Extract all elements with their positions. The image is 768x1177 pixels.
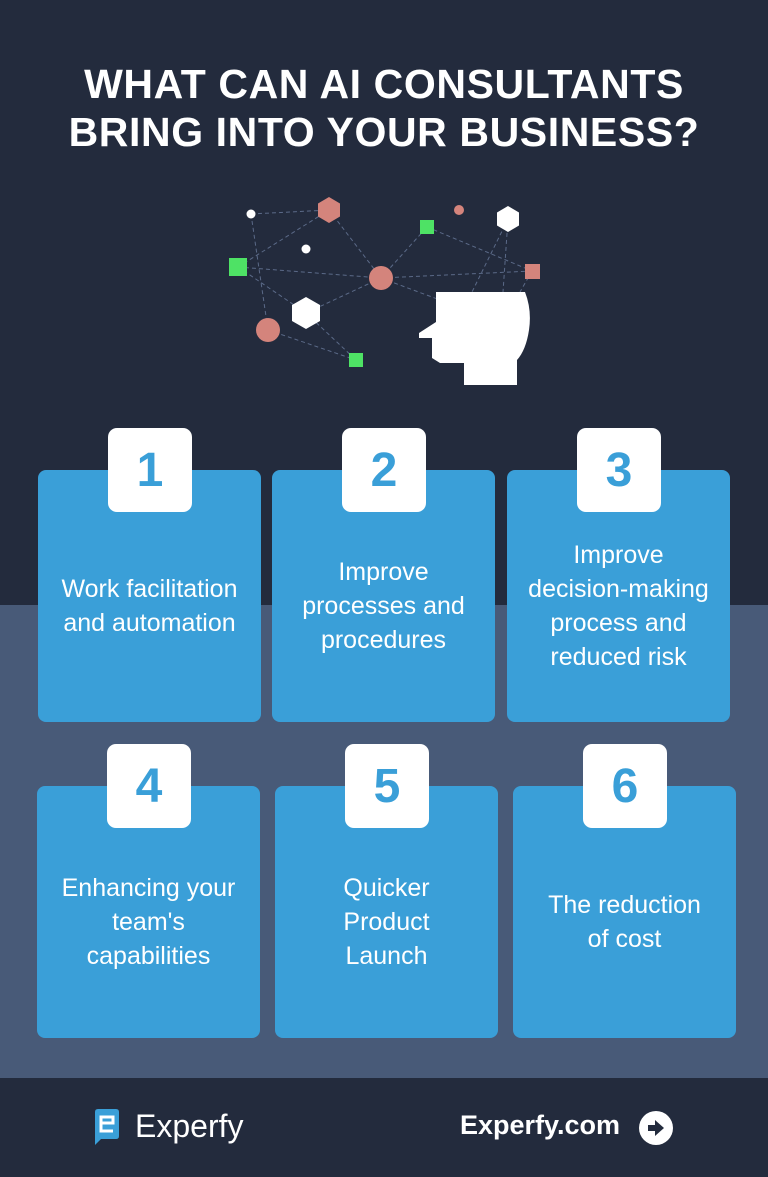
card 4: capabilities bbox=[87, 942, 210, 970]
number 3: 3 bbox=[606, 444, 632, 496]
icon: logo mark bbox=[95, 1109, 119, 1145]
card 1 bbox=[38, 470, 261, 722]
icon: arrow circle bbox=[639, 1111, 673, 1145]
card 5: Product bbox=[343, 908, 430, 936]
number 1: 1 bbox=[137, 444, 163, 496]
card 3: Improve bbox=[573, 541, 664, 569]
card 3: process and bbox=[550, 609, 687, 637]
card 5: Launch bbox=[345, 942, 428, 970]
title bbox=[69, 61, 699, 155]
card 3 bbox=[507, 470, 730, 722]
card 4: team's bbox=[112, 908, 185, 936]
card 4 bbox=[37, 786, 260, 1038]
card 1: and automation bbox=[63, 609, 236, 637]
number 1 bbox=[108, 428, 192, 512]
card 2 bbox=[272, 470, 495, 722]
card 5: Quicker bbox=[343, 874, 430, 902]
number 5: 5 bbox=[374, 760, 400, 812]
number 6: 6 bbox=[612, 760, 638, 812]
number 2 bbox=[342, 428, 426, 512]
title: WHAT CAN AI CONSULTANTS bbox=[84, 61, 684, 107]
number 4 bbox=[107, 744, 191, 828]
card 2: procedures bbox=[321, 626, 446, 654]
card 6 bbox=[513, 786, 736, 1038]
illustration: network and head bbox=[229, 197, 540, 385]
card 4: Enhancing your bbox=[62, 874, 235, 902]
card 1: Work facilitation bbox=[62, 575, 238, 603]
number 4: 4 bbox=[136, 760, 162, 812]
card 2: processes and bbox=[302, 592, 465, 620]
title: BRING INTO YOUR BUSINESS? bbox=[69, 109, 699, 155]
number 2: 2 bbox=[371, 444, 397, 496]
card 5 bbox=[275, 786, 498, 1038]
card 3: decision-making bbox=[528, 575, 709, 603]
number 5 bbox=[345, 744, 429, 828]
logo: Experfy: Experfy bbox=[135, 1108, 243, 1144]
number 3 bbox=[577, 428, 661, 512]
card 6: of cost bbox=[588, 925, 661, 953]
link: Experfy.com: Experfy.com bbox=[460, 1110, 620, 1140]
card 6: The reduction bbox=[548, 891, 701, 919]
card 2: Improve bbox=[338, 558, 429, 586]
number 6 bbox=[583, 744, 667, 828]
card 3: reduced risk bbox=[550, 643, 687, 671]
